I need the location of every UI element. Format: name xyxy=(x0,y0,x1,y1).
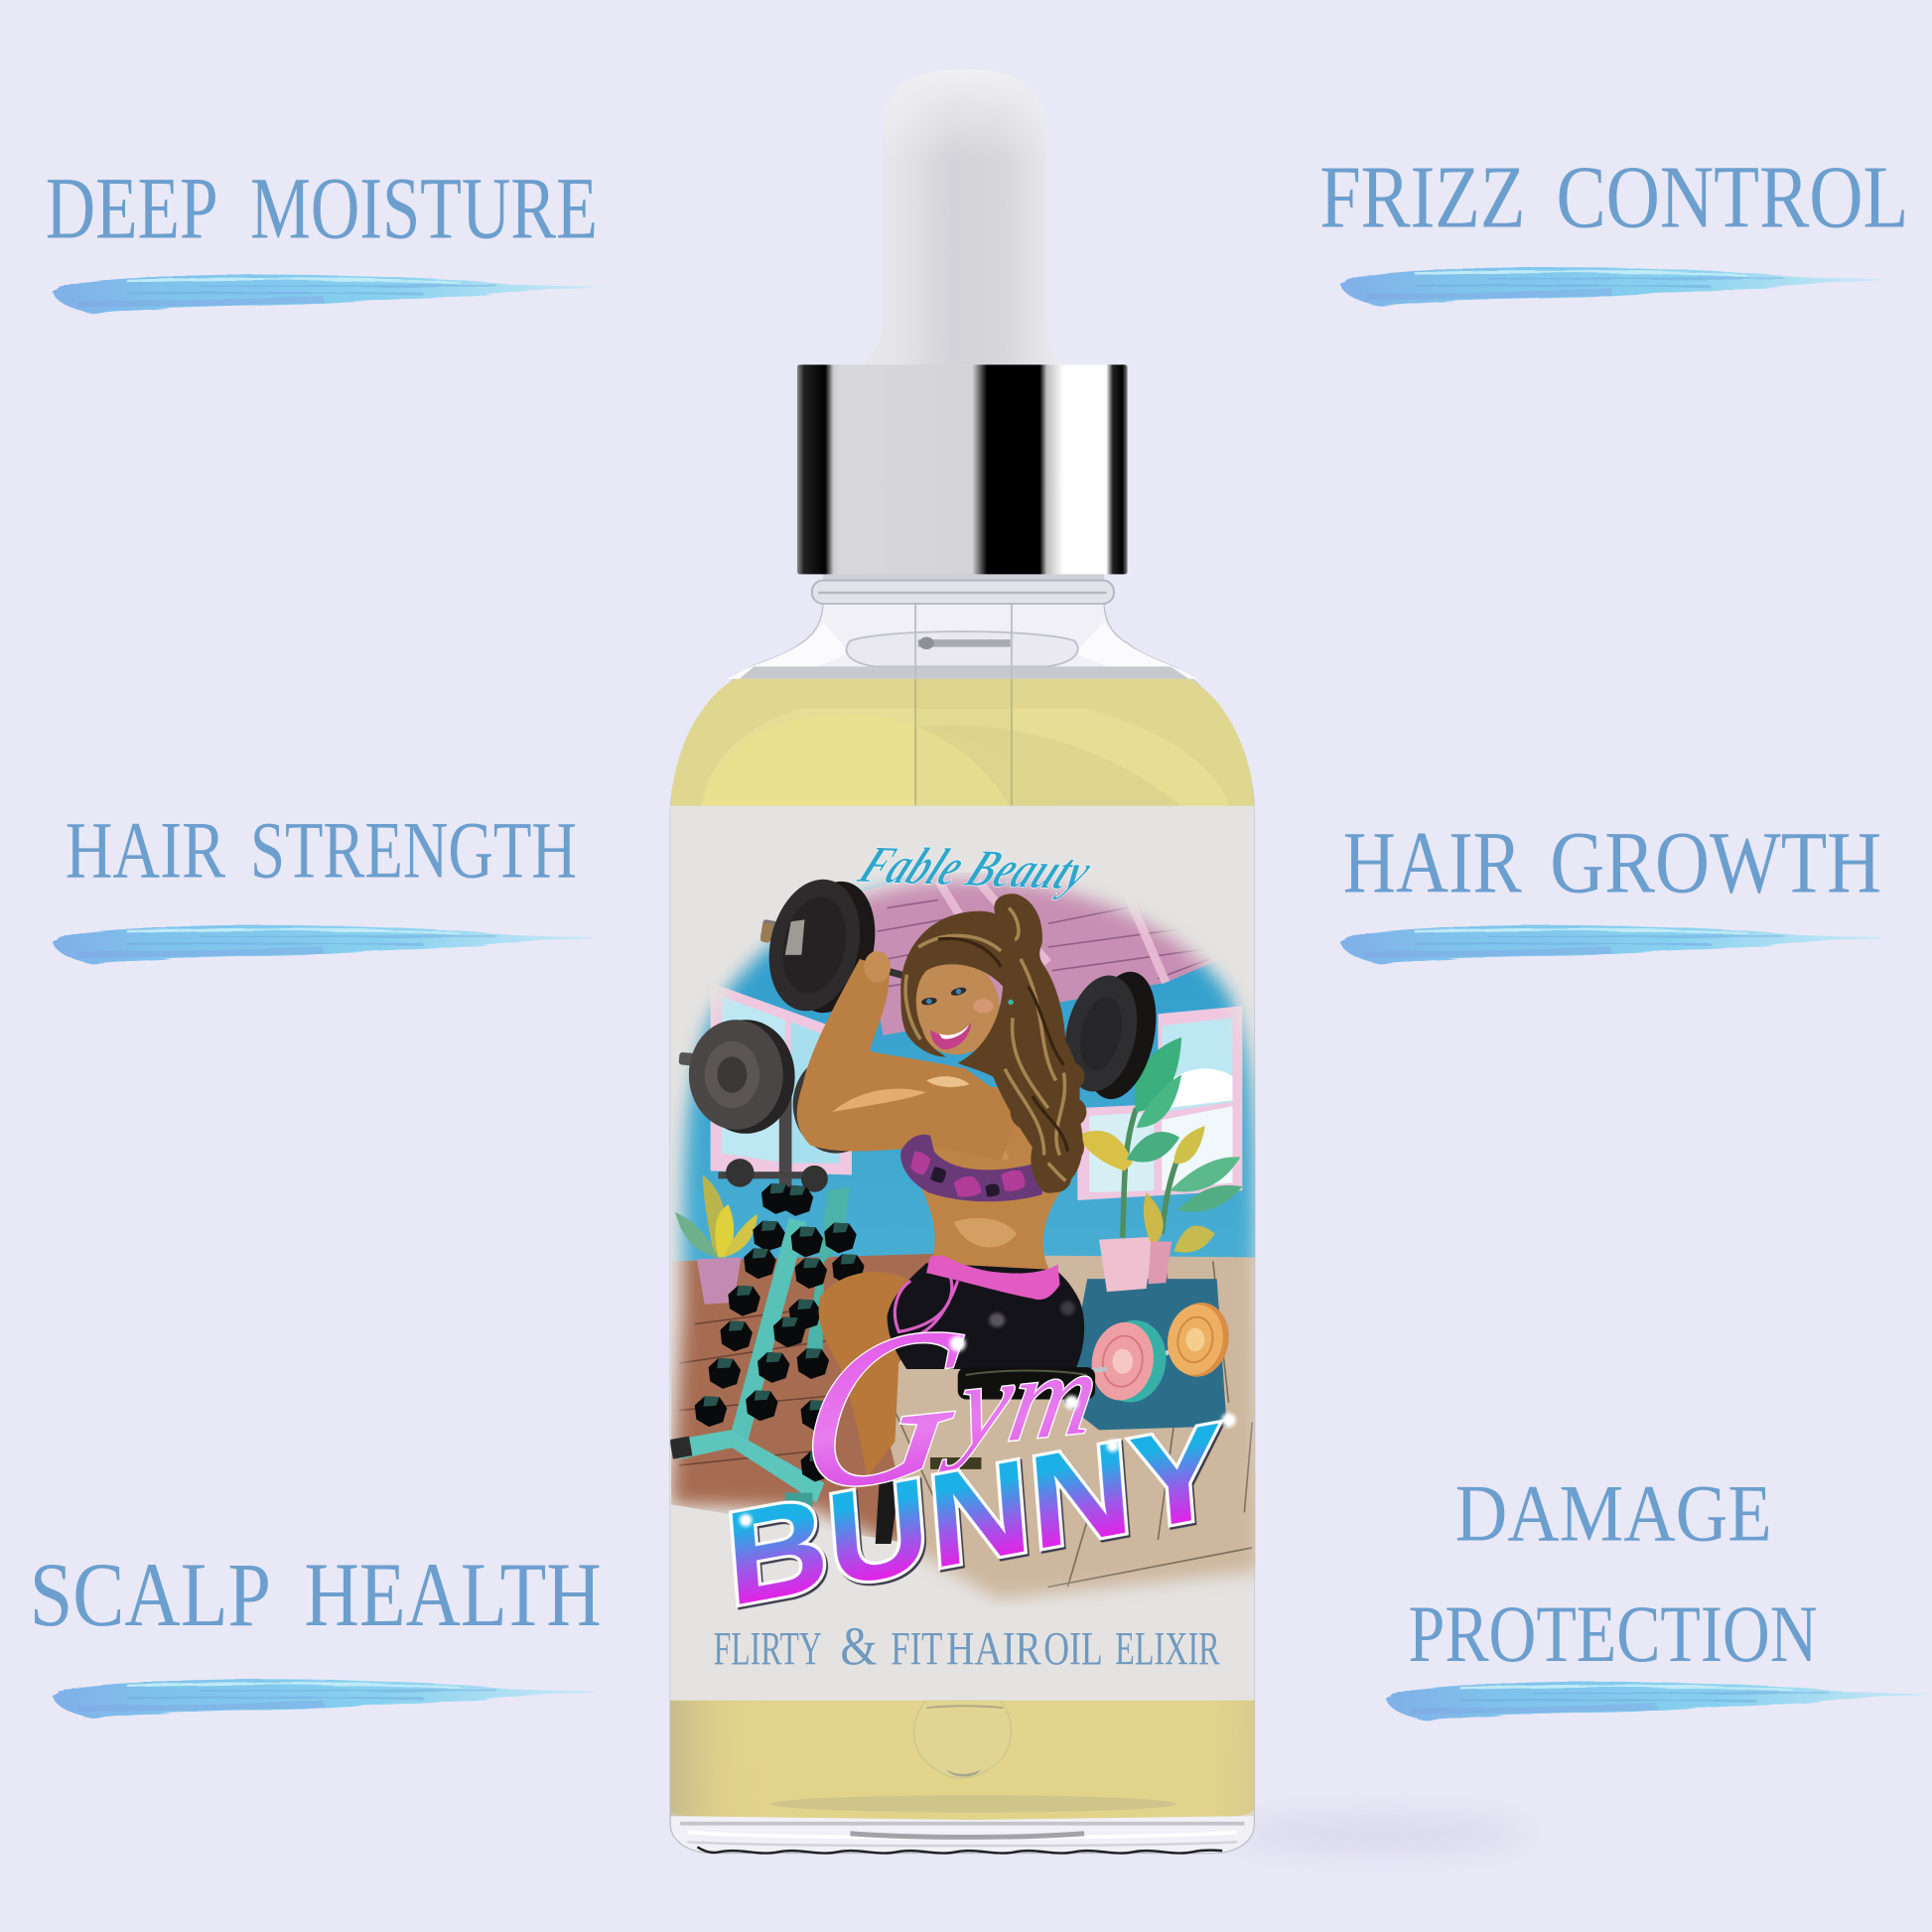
barbell: far plates xyxy=(1065,971,1156,1100)
heading: hair growth xyxy=(1340,814,1885,964)
tagline: FIT xyxy=(891,1624,943,1676)
shorts xyxy=(888,1263,1084,1369)
torso xyxy=(900,1084,1063,1271)
product name: gym xyxy=(812,1331,1093,1487)
heading: deep moisture: MOISTURE xyxy=(250,160,598,258)
heading: scalp health xyxy=(30,1544,602,1718)
product name: gym: G xyxy=(784,1277,983,1539)
sparkles xyxy=(740,1335,1236,1527)
brush stroke xyxy=(1340,925,1885,964)
brush stroke xyxy=(53,275,598,313)
heading: deep moisture xyxy=(46,160,598,313)
product name: gym: ym xyxy=(937,1325,1108,1474)
colored barbell xyxy=(1090,1303,1229,1402)
dropper bulb xyxy=(864,69,1062,364)
heading: hair strength: HAIR xyxy=(66,805,225,896)
dropper bottle xyxy=(669,69,1256,1854)
raised arm xyxy=(797,959,1021,1161)
stand plates and post xyxy=(679,1020,850,1192)
tagline: OIL xyxy=(1043,1624,1103,1676)
exercise mat xyxy=(1063,1279,1227,1430)
brush stroke xyxy=(53,925,598,964)
tagline: & xyxy=(840,1616,878,1677)
heading: deep moisture: DEEP xyxy=(46,160,218,258)
hair xyxy=(900,894,1086,1193)
tagline: ELIXIR xyxy=(1115,1624,1220,1676)
dumbbells xyxy=(695,1183,865,1482)
heading: hair growth: HAIR xyxy=(1343,814,1522,912)
right window xyxy=(1077,1006,1242,1200)
glass neck and body xyxy=(670,569,1254,1854)
bottle shadow xyxy=(1232,1816,1528,1851)
heading: frizz control xyxy=(1319,146,1908,306)
heading: damage protection: PROTECTION xyxy=(1409,1588,1818,1679)
woman xyxy=(797,894,1086,1477)
tagline: FLIRTY xyxy=(714,1624,822,1676)
heading: scalp health: SCALP xyxy=(30,1544,271,1645)
brush stroke xyxy=(53,1680,598,1718)
floor xyxy=(671,1253,1009,1560)
tagline xyxy=(714,1616,1220,1677)
weight bench xyxy=(876,1367,1095,1544)
sports bra xyxy=(900,1135,1044,1201)
brush stroke xyxy=(1340,268,1885,306)
ceiling xyxy=(860,873,1221,1035)
face xyxy=(915,964,1000,1054)
heading: hair growth: GROWTH xyxy=(1550,814,1881,912)
left window xyxy=(711,983,852,1174)
gym room background xyxy=(671,873,1256,1606)
brush stroke xyxy=(1386,1682,1931,1721)
product name: bunny: BUNNY xyxy=(721,1396,1230,1634)
dumbbell rack xyxy=(669,1183,865,1508)
oil xyxy=(670,679,1254,1820)
dropper tip inside oil xyxy=(914,1701,1011,1778)
right plant xyxy=(1077,1037,1242,1292)
heading: hair strength xyxy=(53,805,598,964)
chrome collar xyxy=(797,364,1128,574)
heading: damage protection xyxy=(1386,1467,1931,1721)
heading: scalp health: HEALTH xyxy=(305,1544,602,1645)
heading: frizz control: FRIZZ xyxy=(1319,146,1525,246)
glass base xyxy=(680,1824,1244,1854)
heading: damage protection: DAMAGE xyxy=(1455,1467,1772,1558)
label xyxy=(669,806,1256,1701)
thigh xyxy=(819,1272,910,1477)
brand: fable beauty: Fable Beauty xyxy=(849,836,1102,901)
left plant xyxy=(675,1174,758,1305)
barbell: near plates xyxy=(760,880,902,1013)
label illustration xyxy=(669,836,1256,1634)
tagline: HAIR xyxy=(946,1624,1041,1676)
heading: hair strength: STRENGTH xyxy=(250,805,577,896)
